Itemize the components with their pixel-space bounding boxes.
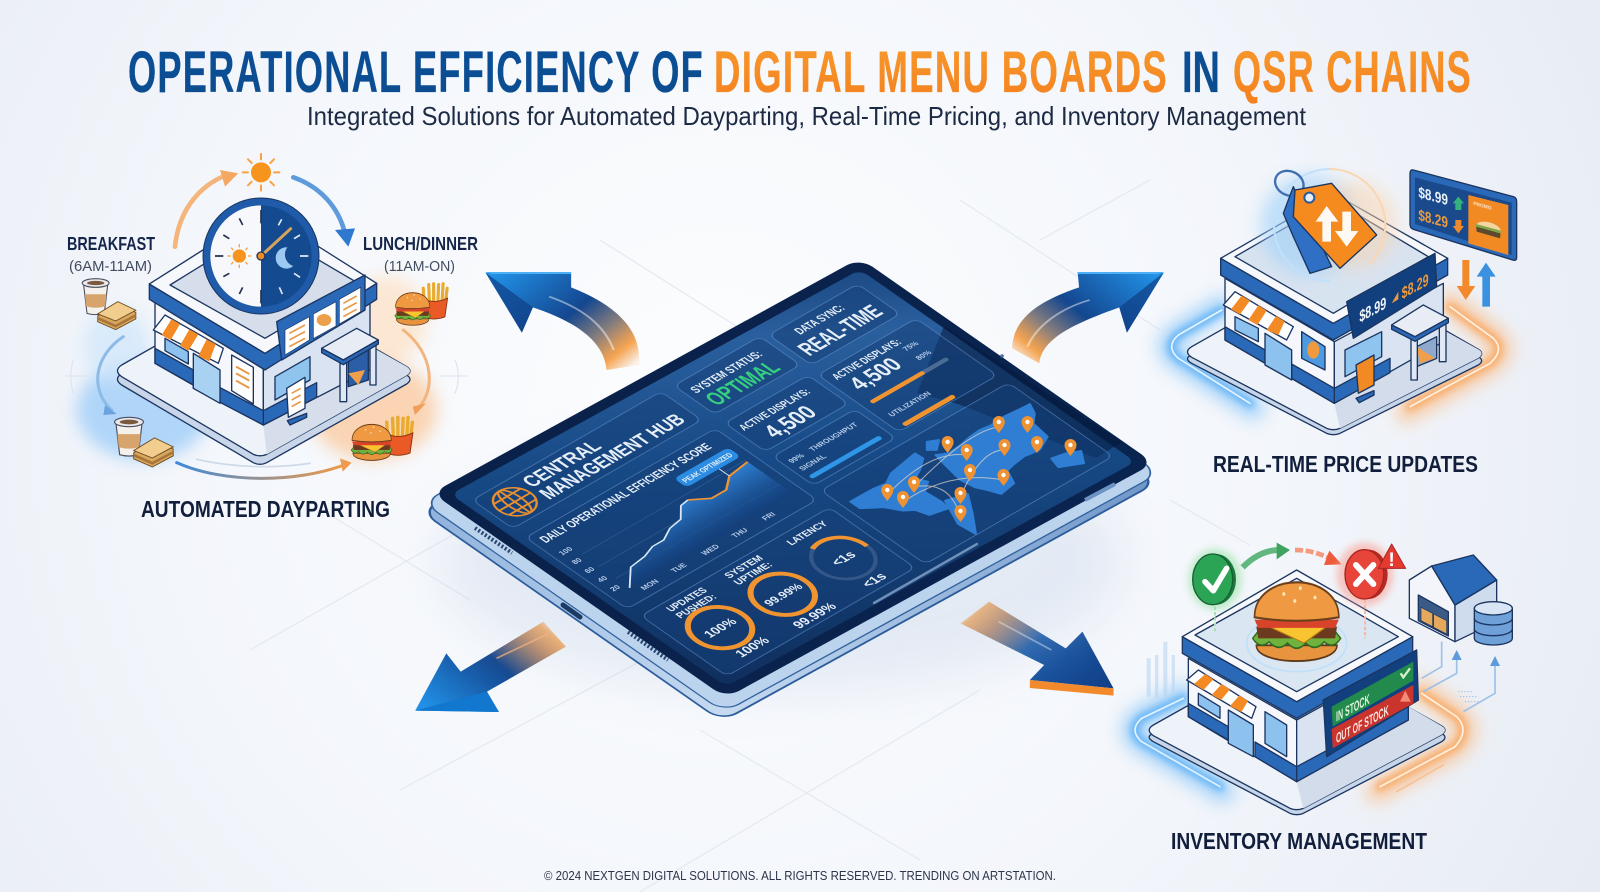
- panel: efficiency chart: 40: [595, 574, 610, 584]
- label: lunch/dinner: LUNCH/DINNER: [363, 234, 478, 254]
- title: OPERATIONAL EFFICIENCY OF: [128, 40, 704, 105]
- panel: system status: OPTIMAL: [699, 357, 786, 409]
- icon: warning: !: [1388, 550, 1395, 571]
- tablet body: [421, 258, 1159, 721]
- arrow: lower left: [415, 622, 566, 712]
- label: lunch/dinner: (11AM-ON): [384, 258, 455, 275]
- panel: active displays bars: UTILIZATION: [886, 390, 934, 418]
- panel: data sync: DATA SYNC:: [791, 302, 848, 337]
- panel: efficiency chart: TUE: [669, 561, 689, 574]
- arrow: stock flow green: [1243, 543, 1290, 567]
- title: IN: [1182, 40, 1220, 105]
- stock status board: [1323, 650, 1418, 757]
- store building: [1221, 193, 1448, 403]
- dashboard content: [472, 278, 1113, 679]
- icon: database: [1474, 602, 1512, 645]
- panel: active displays bars: [818, 318, 997, 432]
- drive-thru canopy: [322, 328, 378, 402]
- panel: active displays bars: ACTIVE DISPLAYS:: [830, 338, 905, 382]
- panel: automated dayparting: [65, 154, 467, 478]
- arrow: to dayparting: [486, 272, 639, 370]
- icon: in-stock check: [1188, 549, 1242, 633]
- heading: inventory management: INVENTORY MANAGEMENT: [1171, 828, 1427, 854]
- panel: gauges: [641, 508, 915, 676]
- store building: [149, 212, 377, 425]
- icon: burger and fries bottom: [351, 417, 413, 460]
- awning: [1187, 670, 1256, 718]
- stock status board: IN STOCK: [1336, 690, 1370, 725]
- panel: active displays: [725, 375, 849, 452]
- panel: hub header: CENTRAL: [518, 437, 607, 491]
- arrow: to price updates: [1012, 272, 1164, 363]
- price board: [1347, 253, 1437, 338]
- price tag: [1260, 166, 1397, 281]
- panel: active displays bars: 75%: [900, 340, 921, 353]
- awning: [153, 315, 223, 363]
- gauge: latency: <1s: [828, 549, 859, 568]
- label: breakfast: (6AM-11AM): [69, 258, 152, 275]
- panel: system status: SYSTEM STATUS:: [687, 349, 766, 395]
- icon: out-of-stock cross: [1337, 543, 1393, 638]
- label: breakfast: [67, 234, 155, 275]
- panel: hub header: MANAGEMENT HUB: [535, 411, 691, 503]
- panel: tablet central management hub: [421, 258, 1159, 721]
- drive-thru canopy: [1392, 305, 1448, 380]
- panel: progress: 99%: [786, 452, 807, 465]
- floating price screen: $8.29: [1418, 207, 1448, 232]
- glows: [77, 277, 437, 460]
- panel: system status: [674, 336, 800, 414]
- panel: gauges: PUSHED:: [674, 593, 720, 620]
- panel: efficiency chart: FRI: [760, 511, 778, 522]
- panel: progress: SIGNAL: [797, 453, 829, 472]
- panel: efficiency chart: DAILY OPERATIONAL EFFICIENCY SCORE: [536, 441, 715, 545]
- neon glow path: [1169, 303, 1501, 412]
- menu board: [277, 275, 365, 360]
- panel: active displays: ACTIVE DISPLAYS:: [737, 387, 814, 433]
- panel: active displays bars: 4,500: [843, 354, 908, 394]
- price board: $8.29: [1402, 270, 1429, 303]
- arrows to warehouse: [1422, 642, 1500, 712]
- heading: automated dayparting: AUTOMATED DAYPARTING: [141, 496, 390, 522]
- panel: efficiency chart: 20: [608, 583, 623, 593]
- clock: [203, 198, 319, 314]
- subtitle: Integrated Solutions for Automated Dayparting, Real-Time Pricing, and Inventory Management: [307, 101, 1307, 131]
- icon: warning: [1378, 544, 1406, 571]
- gauge: system uptime: 99.99%: [761, 581, 806, 608]
- price change arrows: [1457, 260, 1496, 307]
- panel: real-time price updates: [1169, 166, 1517, 435]
- platform: [117, 287, 410, 464]
- a-frame sign: [1356, 355, 1374, 403]
- neon glow path: [1132, 690, 1465, 792]
- map pins: [881, 416, 1076, 522]
- panel: hub header: [472, 392, 702, 529]
- gauge: updates pushed: [674, 599, 779, 666]
- label: lunch/dinner: [363, 234, 478, 275]
- stock status board: OUT OF STOCK: [1336, 702, 1389, 746]
- panel: efficiency chart: WED: [699, 543, 722, 557]
- panel: efficiency chart: THU: [729, 526, 751, 539]
- gauge: system uptime: 99.99%: [789, 600, 840, 631]
- gauge: system uptime: [737, 565, 843, 634]
- title: DIGITAL MENU BOARDS: [714, 40, 1168, 105]
- panel: gauges: LATENCY: [785, 520, 831, 547]
- panel: map frame: [821, 383, 1113, 564]
- footer: © 2024 NEXTGEN DIGITAL SOLUTIONS. ALL RIGHTS RESERVED. TRENDING ON ARTSTATION.: [544, 868, 1056, 883]
- a-frame sign: [287, 377, 307, 425]
- heading: real-time price updates: REAL-TIME PRICE UPDATES: [1213, 451, 1478, 477]
- panel: progress: THROUGHPUT: [807, 421, 860, 453]
- icon: warehouse: [1409, 555, 1497, 642]
- gauge: updates pushed: 100%: [700, 615, 740, 640]
- panel: efficiency chart: MON: [638, 577, 661, 592]
- floating price screen: $8.99: [1418, 184, 1448, 209]
- icon: burger and fries top: [395, 284, 448, 325]
- platform: [1187, 268, 1482, 435]
- gauge: updates pushed: 100%: [731, 634, 773, 660]
- arrow: stock flow red: [1295, 550, 1342, 565]
- platform: [1149, 647, 1445, 815]
- cycle arrows: [65, 175, 467, 478]
- panel: data sync: REAL-TIME: [792, 301, 889, 359]
- floating price screen: PROMO: [1473, 201, 1492, 212]
- floating price screen: [1410, 170, 1517, 260]
- icon: breakfast items top: [82, 279, 136, 330]
- panel: gauges: UPTIME:: [732, 561, 776, 587]
- icon: burger: [1247, 582, 1347, 672]
- world map: [850, 404, 1084, 534]
- label: breakfast: BREAKFAST: [67, 234, 155, 254]
- panel: efficiency chart: PEAK OPTIMIZED: [680, 452, 735, 484]
- stock bars: [1147, 642, 1175, 698]
- panel: data sync: [769, 284, 900, 365]
- gauge: latency: <1s: [858, 570, 890, 590]
- gauge: latency: [790, 520, 909, 598]
- panel: efficiency chart: [526, 429, 817, 609]
- panel: progress: [773, 409, 896, 485]
- panel: inventory management: [1132, 543, 1512, 815]
- panel: active displays: 4,500: [757, 402, 822, 442]
- awning: [1223, 292, 1293, 340]
- store building: [1182, 570, 1413, 782]
- panel: efficiency chart: 100: [557, 545, 575, 557]
- icon: sun: [243, 154, 279, 191]
- icon: globe: [484, 482, 546, 522]
- icon: breakfast items bottom: [115, 417, 173, 467]
- panel: efficiency chart: 60: [582, 565, 597, 575]
- price board: $8.99: [1359, 293, 1386, 327]
- title: [128, 40, 1472, 105]
- panel: active displays bars: 80%: [913, 349, 934, 362]
- panel: gauges: UPDATES: [664, 586, 711, 614]
- panel: efficiency chart: 80: [569, 556, 584, 566]
- arrow: to inventory: [960, 602, 1114, 696]
- panel: gauges: SYSTEM: [722, 554, 766, 581]
